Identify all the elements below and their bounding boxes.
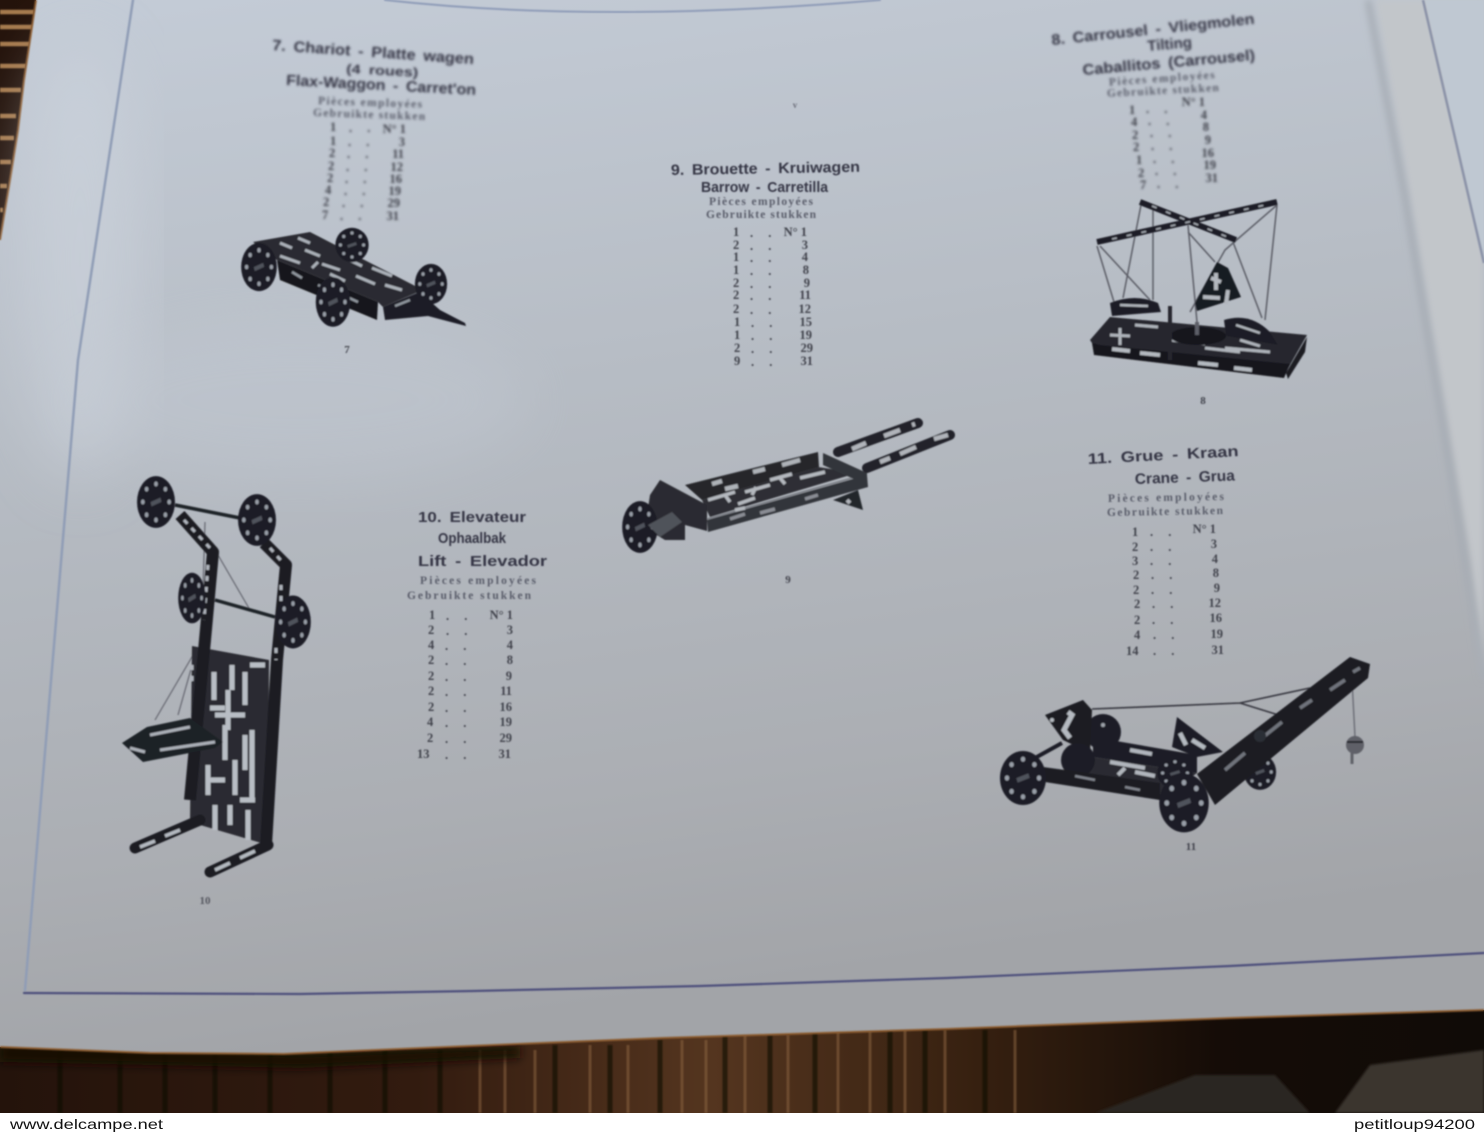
model 10 instructions: elevateur: 16 xyxy=(500,700,512,714)
model 10 instructions: elevateur: 31 xyxy=(498,747,511,761)
model 10 instructions: elevateur: Ophaalbak xyxy=(438,530,507,547)
model 7 instructions: chariot: N° 1 xyxy=(383,122,406,136)
model 8 instructions: carrousel: 9 xyxy=(1205,133,1211,147)
model 7 illustration: flat wagon xyxy=(241,228,466,327)
model 11 instructions: grue: 11. Grue - Kraan xyxy=(1087,443,1239,468)
model 9 instructions: brouette: 1 xyxy=(733,225,739,239)
watermark bar xyxy=(0,1113,1484,1132)
model 7 instructions: chariot: 19 xyxy=(388,184,401,198)
model 7 instructions: chariot: 16 xyxy=(390,172,402,186)
watermark right: petitloup94200 xyxy=(1354,1116,1475,1132)
model 10 instructions: elevateur: 11 xyxy=(500,684,512,698)
model 10 instructions: elevateur: . . xyxy=(446,624,467,638)
model 9 instructions: brouette: . . xyxy=(750,303,771,317)
model 11 instructions: grue: 9 xyxy=(1214,581,1220,595)
watermark left: www.delcampe.net xyxy=(9,1116,163,1132)
model 11 instructions: grue: 1 xyxy=(1132,525,1138,539)
model 10 instructions: elevateur: . . xyxy=(445,716,466,730)
model 9 instructions: brouette: 1 xyxy=(734,328,740,342)
model 7 instructions: chariot: 2 xyxy=(327,171,333,185)
model 7 instructions: chariot: 11 xyxy=(392,147,404,161)
model 8 instructions: carrousel xyxy=(1051,11,1256,192)
model 7 instructions: chariot: 31 xyxy=(386,209,399,223)
model 9 illustration: barrow xyxy=(622,423,950,553)
model 10 instructions: elevateur: . . xyxy=(445,670,466,684)
model 9 instructions: brouette: 1 xyxy=(734,315,740,329)
model 7 instructions: chariot: 1 xyxy=(330,120,336,134)
model 11 instructions: grue: 12 xyxy=(1208,596,1221,610)
model 7 instructions: chariot xyxy=(272,37,476,223)
model 10 instructions: elevateur: Pièces employées xyxy=(420,575,537,587)
model 7 instructions: chariot: 7 xyxy=(322,208,328,222)
model 10 instructions: elevateur: 2 xyxy=(428,700,434,714)
model 10 instructions: elevateur: 29 xyxy=(500,731,512,745)
model 11 instructions: grue: Gebruikte stukken xyxy=(1107,505,1224,519)
model 8 instructions: carrousel: Tilting xyxy=(1147,34,1193,55)
model 9 instructions: brouette: 2 xyxy=(734,341,740,355)
model 10 instructions: elevateur: . . xyxy=(445,685,466,699)
model 8 instructions: carrousel: 31 xyxy=(1206,171,1218,185)
model 8 instructions: carrousel: 4 xyxy=(1201,108,1208,122)
model 11 instructions: grue: 4 xyxy=(1134,628,1141,642)
model 8 instructions: carrousel: . . xyxy=(1151,139,1172,153)
model 8 instructions: carrousel: . . xyxy=(1148,114,1169,128)
model 9 instructions: brouette: . . xyxy=(751,342,772,356)
model 8 instructions: carrousel: 16 xyxy=(1202,146,1214,160)
model 9 instructions: brouette: 2 xyxy=(733,238,739,252)
model 10 instructions: elevateur: 8 xyxy=(507,653,513,667)
model 10 instructions: elevateur: Lift - Elevador xyxy=(418,553,547,570)
model 8 instructions: carrousel: Pièces employées xyxy=(1109,69,1216,89)
model 7 instructions: chariot: 3 xyxy=(399,135,405,149)
model 11 instructions: grue: Pièces employées xyxy=(1108,491,1225,505)
model 9 instructions: brouette: 11 xyxy=(799,288,811,302)
model 11 instructions: grue: . . xyxy=(1151,568,1172,582)
model 7 instructions: chariot: . . xyxy=(348,135,369,149)
model 11 instructions: grue: 4 xyxy=(1212,552,1219,566)
model 11 instructions: grue: 14 xyxy=(1126,644,1139,658)
model 8 instructions: carrousel: 1 xyxy=(1136,153,1142,167)
model 11 instructions: grue: 3 xyxy=(1211,537,1217,551)
model 9 instructions: brouette: 31 xyxy=(800,354,813,368)
model 10 instructions: elevateur xyxy=(407,509,547,762)
model 11 instructions: grue: 2 xyxy=(1133,568,1139,582)
model 10 instructions: elevateur: 2 xyxy=(428,684,434,698)
model 7 instructions: chariot: 2 xyxy=(328,159,334,173)
model 9 instructions: brouette xyxy=(671,159,860,369)
model 10 instructions: elevateur: 2 xyxy=(427,731,433,745)
model 10 instructions: elevateur: 10. Elevateur xyxy=(418,509,526,526)
caption 7: 7 xyxy=(344,344,350,356)
model 10 instructions: elevateur: . . xyxy=(445,654,466,668)
model 10 instructions: elevateur: . . xyxy=(445,701,466,715)
model 8 instructions: carrousel: . . xyxy=(1150,126,1171,140)
model 9 instructions: brouette: 12 xyxy=(798,302,811,316)
model 9 instructions: brouette: Barrow - Carretilla xyxy=(701,179,829,196)
model 11 instructions: grue: 2 xyxy=(1133,583,1139,597)
model 9 instructions: brouette: . . xyxy=(750,251,771,265)
caption 9: 9 xyxy=(785,574,791,586)
model 8 illustration: carrousel xyxy=(1090,202,1307,379)
model 10 instructions: elevateur: 19 xyxy=(500,715,512,729)
model 7 instructions: chariot: 7. Chariot - Platte wagen xyxy=(272,37,474,68)
model 9 instructions: brouette: 3 xyxy=(802,238,808,252)
model 7 instructions: chariot: . . xyxy=(346,160,367,174)
model 9 instructions: brouette: . . xyxy=(751,316,772,330)
model 10 instructions: elevateur: . . xyxy=(445,639,466,653)
model 7 instructions: chariot: . . xyxy=(347,147,368,161)
model 10 instructions: elevateur: N° 1 xyxy=(490,608,513,622)
model 9 instructions: brouette: . . xyxy=(750,277,771,291)
model 8 instructions: carrousel: Caballitos (Carrousel) xyxy=(1082,47,1256,79)
model 11 instructions: grue: 2 xyxy=(1134,613,1140,627)
model 10 instructions: elevateur: 3 xyxy=(507,623,513,637)
model 9 instructions: brouette: . . xyxy=(751,355,772,369)
model 11 instructions: grue: Crane - Grua xyxy=(1135,467,1236,488)
model 7 instructions: chariot: 4 xyxy=(325,183,332,197)
caption 11: 11 xyxy=(1186,841,1196,853)
model 11 instructions: grue: . . xyxy=(1150,554,1171,568)
caption 8: 8 xyxy=(1200,395,1206,407)
model 10 instructions: elevateur: 2 xyxy=(428,653,434,667)
model 9 instructions: brouette: 2 xyxy=(733,276,739,290)
model 7 instructions: chariot: . . xyxy=(344,184,365,198)
model 10 instructions: elevateur: 2 xyxy=(428,623,434,637)
model 11 instructions: grue: . . xyxy=(1153,644,1174,658)
model 8 instructions: carrousel: 2 xyxy=(1132,128,1138,142)
model 11 instructions: grue: 3 xyxy=(1132,554,1138,568)
model 8 instructions: carrousel: . . xyxy=(1153,152,1174,166)
model 9 instructions: brouette: 9 xyxy=(734,354,740,368)
model 9 instructions: brouette: N° 1 xyxy=(784,225,807,239)
model 9 instructions: brouette: Gebruikte stukken xyxy=(706,209,817,221)
model 8 instructions: carrousel: 7 xyxy=(1140,178,1146,192)
model 7 instructions: chariot: . . xyxy=(340,209,361,223)
model 10 instructions: elevateur: . . xyxy=(446,609,467,623)
model 10 instructions: elevateur: . . xyxy=(445,732,466,746)
model 10 instructions: elevateur: 4 xyxy=(427,715,434,729)
model 10 illustration: lift xyxy=(122,476,311,872)
model 10 instructions: elevateur: 1 xyxy=(429,608,435,622)
model 10 instructions: elevateur: 4 xyxy=(507,638,514,652)
model 11 instructions: grue: . . xyxy=(1152,613,1173,627)
model 11 instructions: grue: 31 xyxy=(1212,643,1224,657)
model 11 instructions: grue: 2 xyxy=(1132,540,1138,554)
model 9 instructions: brouette: 1 xyxy=(733,263,739,277)
model 11 instructions: grue: 8 xyxy=(1213,566,1219,580)
model 9 instructions: brouette: . . xyxy=(751,329,772,343)
model 8 instructions: carrousel: 2 xyxy=(1133,140,1139,154)
model 7 instructions: chariot: 12 xyxy=(390,160,403,174)
model 7 instructions: chariot: Gebruikte stukken xyxy=(313,107,426,123)
model 10 instructions: elevateur: 9 xyxy=(506,669,512,683)
model 7 instructions: chariot: . . xyxy=(342,196,363,210)
model 11 instructions: grue: 2 xyxy=(1134,597,1140,611)
model 9 instructions: brouette: . . xyxy=(750,239,771,253)
model 11 illustration: crane xyxy=(1000,657,1370,832)
model 9 instructions: brouette: 1 xyxy=(733,250,739,264)
model 8 instructions: carrousel: . . xyxy=(1157,177,1178,191)
model 8 instructions: carrousel: 8. Carrousel - Vliegmolen xyxy=(1051,11,1255,49)
model 7 instructions: chariot: (4 roues) xyxy=(346,61,419,80)
model 7 instructions: chariot: Flax-Waggon - Carret'on xyxy=(286,72,476,99)
model 11 instructions: grue xyxy=(1087,443,1239,658)
model 11 instructions: grue: 16 xyxy=(1210,611,1222,625)
model 9 instructions: brouette: Pièces employées xyxy=(709,196,814,208)
model 9 instructions: brouette: 2 xyxy=(733,288,739,302)
caption 10: 10 xyxy=(200,895,211,907)
model 7 instructions: chariot: Pièces employées xyxy=(318,95,423,111)
model 8 instructions: carrousel: 1 xyxy=(1129,103,1135,117)
model 10 instructions: elevateur: Gebruikte stukken xyxy=(407,590,532,602)
model 8 instructions: carrousel: 8 xyxy=(1203,120,1209,134)
model 9 instructions: brouette: 8 xyxy=(803,263,809,277)
model 8 instructions: carrousel: Gebruikte stukken xyxy=(1107,82,1220,100)
model 8 instructions: carrousel: . . xyxy=(1155,164,1176,178)
model 8 instructions: carrousel: 4 xyxy=(1131,115,1138,129)
model 9 instructions: brouette: 19 xyxy=(800,328,812,342)
model 9 instructions: brouette: 4 xyxy=(802,250,809,264)
model 9 instructions: brouette: . . xyxy=(750,289,771,303)
model 8 instructions: carrousel: . . xyxy=(1146,102,1167,116)
model 8 instructions: carrousel: N° 1 xyxy=(1182,95,1205,109)
model 8 instructions: carrousel: 19 xyxy=(1204,158,1216,172)
small print mark: v xyxy=(793,100,798,110)
model 9 instructions: brouette: 2 xyxy=(733,302,739,316)
model 7 instructions: chariot: 2 xyxy=(323,195,329,209)
model 11 instructions: grue: N° 1 xyxy=(1193,522,1216,536)
wood stripes at left edge xyxy=(0,12,34,210)
model 9 instructions: brouette: 15 xyxy=(800,315,812,329)
model 9 instructions: brouette: 9 xyxy=(804,276,810,290)
model 7 instructions: chariot: 2 xyxy=(329,146,335,160)
model 7 instructions: chariot: . . xyxy=(345,172,366,186)
model 9 instructions: brouette: . . xyxy=(750,264,771,278)
model 11 instructions: grue: . . xyxy=(1151,583,1172,597)
model 9 instructions: brouette: 9. Brouette - Kruiwagen xyxy=(671,159,860,179)
model 7 instructions: chariot: 29 xyxy=(388,196,400,210)
model 11 instructions: grue: . . xyxy=(1152,597,1173,611)
model 10 instructions: elevateur: 2 xyxy=(428,669,434,683)
model 8 instructions: carrousel: 2 xyxy=(1138,166,1144,180)
model 11 instructions: grue: . . xyxy=(1150,540,1171,554)
model 11 instructions: grue: 19 xyxy=(1210,627,1223,641)
model 9 instructions: brouette: . . xyxy=(750,226,771,240)
model 10 instructions: elevateur: 4 xyxy=(428,638,435,652)
model 11 instructions: grue: . . xyxy=(1153,628,1174,642)
model 10 instructions: elevateur: . . xyxy=(445,748,466,762)
model 9 instructions: brouette: 29 xyxy=(800,341,813,355)
model 7 instructions: chariot: 1 xyxy=(330,134,336,148)
model 7 instructions: chariot: . . xyxy=(349,121,370,135)
model 11 instructions: grue: . . xyxy=(1150,525,1171,539)
model 10 instructions: elevateur: 13 xyxy=(417,747,430,761)
